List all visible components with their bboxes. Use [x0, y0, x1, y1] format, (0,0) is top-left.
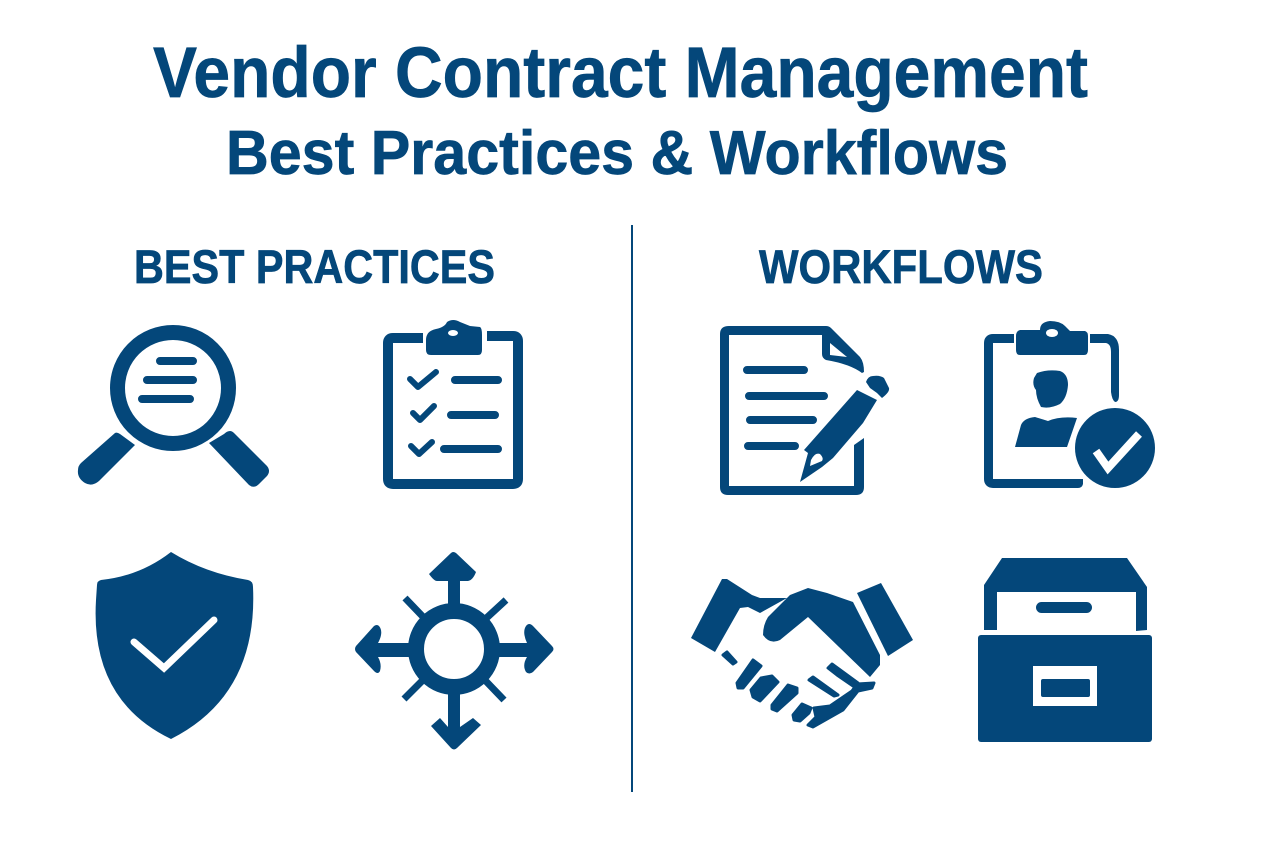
icon: hub with arrows — [355, 552, 554, 750]
panel: best practices — [78, 240, 554, 750]
title: Best Practices & Workflows — [226, 119, 1008, 188]
title — [153, 34, 1088, 188]
heading: workflows: WORKFLOWS — [759, 240, 1043, 293]
icon: shield with check — [96, 552, 253, 739]
heading: best practices: BEST PRACTICES — [134, 240, 495, 293]
panel: workflows — [691, 240, 1157, 742]
icon: file drawer box — [978, 558, 1152, 742]
icon: document with pencil — [720, 326, 889, 495]
title: Vendor Contract Management — [153, 34, 1088, 113]
icon: magnifying glass — [78, 332, 269, 487]
icon: handshake — [691, 579, 913, 727]
icon: checklist clipboard — [388, 320, 518, 484]
icon: clipboard with approved person — [988, 321, 1157, 490]
